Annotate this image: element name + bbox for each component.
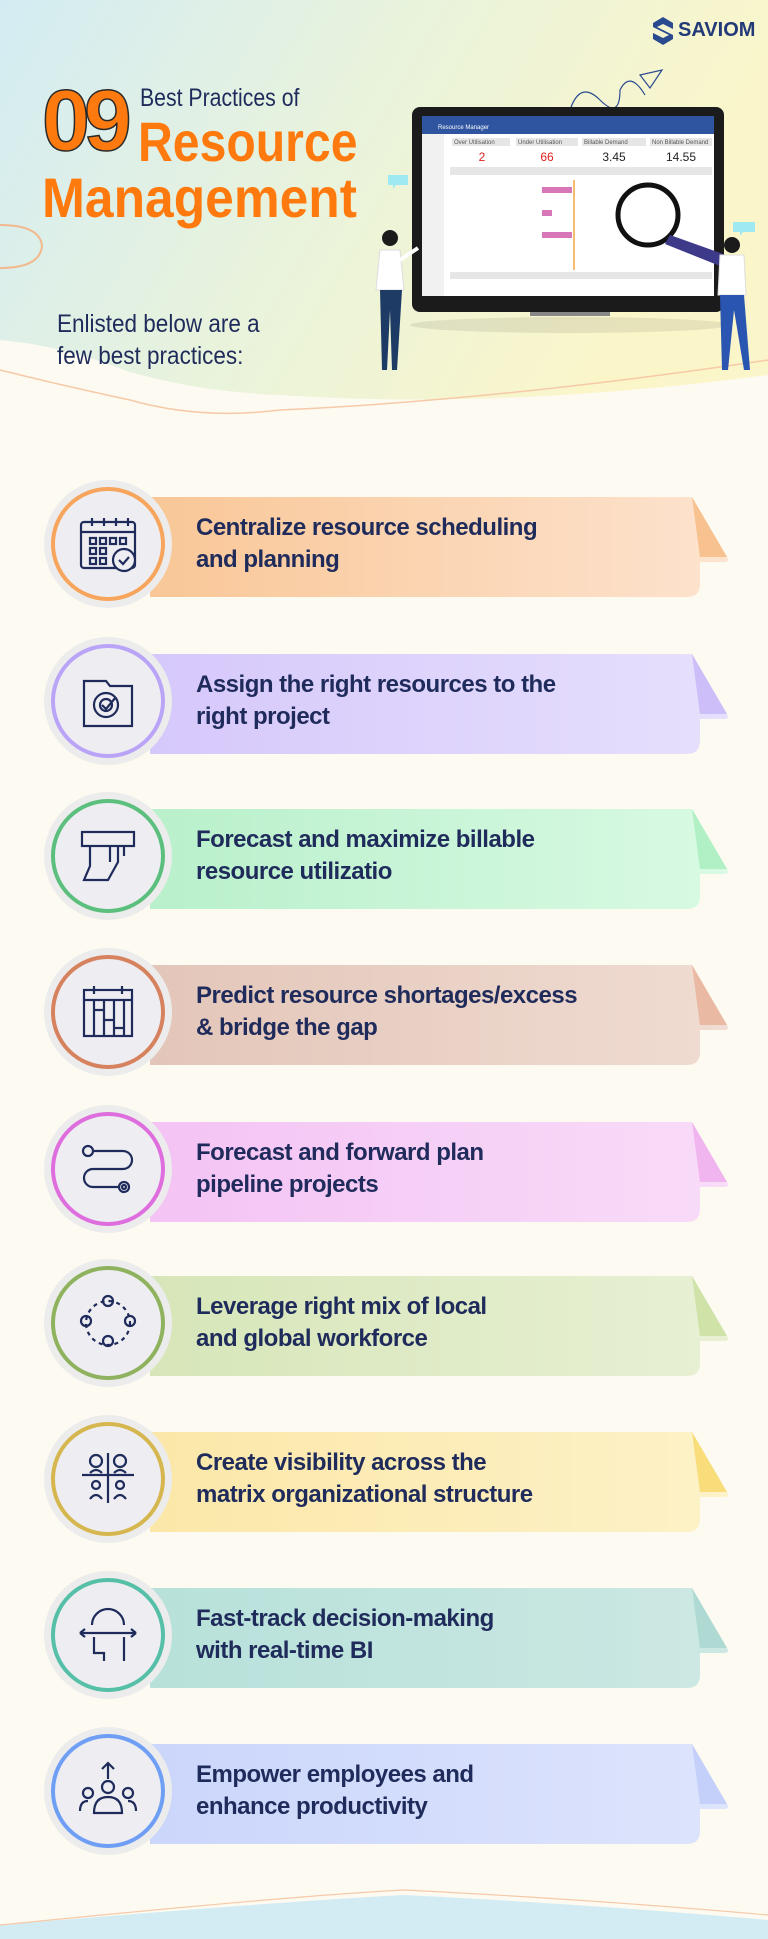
laptop illustration: 14.55 [666,150,696,164]
item 1: Centralize resource scheduling [196,514,537,541]
item 8: with real-time BI [196,1637,373,1664]
item 6: and global workforce [196,1325,427,1352]
logo: SAVIOM [653,17,755,45]
title [42,73,358,229]
laptop illustration: 2 [479,150,486,164]
man [718,237,750,370]
item 7: matrix organizational structure [196,1481,533,1508]
footer wave [0,1889,768,1939]
item 4: Predict resource shortages/excess [196,982,577,1009]
title: Management [42,166,357,229]
intro text: few best practices: [57,342,243,370]
laptop illustration: Under Utilisation [518,140,562,146]
laptop illustration: Resource Manager [438,125,489,131]
item 3: Forecast and maximize billable [196,826,534,853]
item 5: pipeline projects [196,1171,378,1198]
intro text: Enlisted below are a [57,310,260,338]
laptop illustration: 3.45 [602,150,626,164]
laptop illustration: Non Billable Demand [652,140,708,146]
item 2: right project [196,703,330,730]
item 4: & bridge the gap [196,1014,377,1041]
item 9 [44,1727,728,1855]
item 3 [44,792,728,920]
laptop illustration: Billable Demand [584,140,628,146]
title: 09 [42,73,126,169]
item 2: Assign the right resources to the [196,671,556,698]
item 5 [44,1105,728,1233]
woman [376,230,418,370]
item 4 [44,948,728,1076]
item 8: Fast-track decision-making [196,1605,494,1632]
laptop illustration [376,69,755,370]
item 7: Create visibility across the [196,1449,486,1476]
item 2 [44,637,728,765]
item 5: Forecast and forward plan [196,1139,484,1166]
header background [0,0,768,414]
item 6 [44,1259,728,1387]
intro text [57,310,260,370]
title: Best Practices of [140,84,299,112]
item 9: enhance productivity [196,1793,427,1820]
item 8 [44,1571,728,1699]
item 7 [44,1415,728,1543]
title: Resource [138,110,358,173]
logo: SAVIOM: SAVIOM [678,19,755,41]
item 1: and planning [196,546,339,573]
item 1 [44,480,728,608]
item 9: Empower employees and [196,1761,474,1788]
laptop illustration: 66 [540,150,554,164]
laptop illustration: Over Utilisation [454,140,495,146]
item 3: resource utilizatio [196,858,392,885]
item 6: Leverage right mix of local [196,1293,487,1320]
